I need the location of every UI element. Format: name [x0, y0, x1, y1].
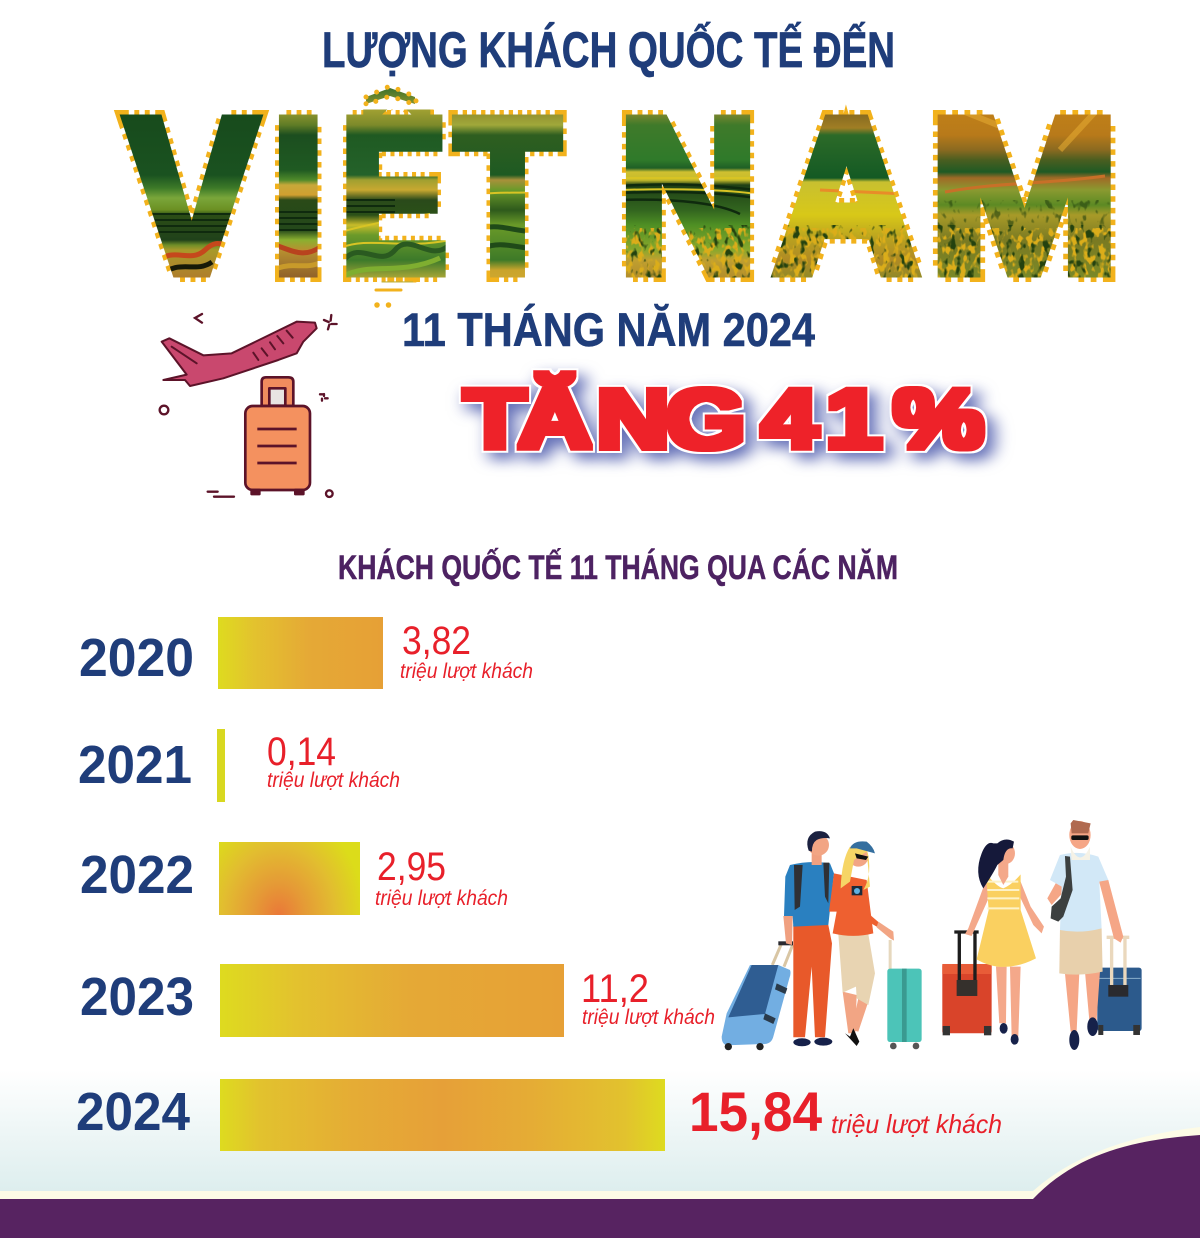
blue suitcase	[1097, 937, 1142, 1035]
woman with cap and camera	[829, 841, 894, 1046]
row 2023: 2023	[80, 967, 194, 1027]
dotted letter outlines: A	[774, 74, 919, 318]
row 2023: 11,2	[581, 967, 649, 1011]
dotted letter outlines: I	[272, 75, 325, 318]
blue rolling suitcase	[722, 941, 793, 1050]
accent marks of the letter E	[366, 86, 416, 305]
row 2023: triệu lượt khách	[582, 1006, 715, 1029]
bar chart	[76, 617, 1002, 1151]
row 2024: triệu lượt khách	[831, 1109, 1002, 1139]
row 2023	[80, 964, 715, 1037]
row 2024	[76, 1079, 1002, 1151]
row 2022: 2,95	[377, 845, 446, 889]
man in sunglasses	[1047, 820, 1123, 1050]
row 2024: 2024	[76, 1082, 190, 1142]
terraced landscape seen through the letters	[120, 88, 1111, 282]
illustration: travellers with luggage	[722, 820, 1142, 1050]
row 2022: 2022	[80, 845, 194, 905]
headline: TĂNG 41%: TĂNG 41%	[464, 372, 984, 466]
row 2022: triệu lượt khách	[375, 887, 508, 910]
bottom pale gradient band	[0, 1070, 1200, 1195]
row 2021	[78, 729, 400, 802]
dotted letter outlines: Ệ	[340, 74, 447, 318]
dotted letter outlines: N	[619, 74, 757, 318]
icon: airplane	[162, 322, 317, 386]
icon: suitcase	[245, 377, 310, 494]
sub heading: 11 THÁNG NĂM 2024	[402, 303, 815, 356]
row 2020	[79, 617, 533, 689]
decorative sparkles around the icon	[160, 314, 337, 497]
red suitcase	[942, 932, 992, 1035]
row 2020: 3,82	[402, 619, 471, 663]
row 2021: triệu lượt khách	[267, 769, 400, 792]
dotted letter outlines: T	[455, 73, 560, 318]
row 2022	[80, 842, 508, 915]
man in blue shirt	[783, 831, 834, 1046]
teal suitcase	[887, 940, 922, 1049]
chart heading: KHÁCH QUỐC TẾ 11 THÁNG QUA CÁC NĂM	[338, 548, 898, 587]
big heading: VIỆT NAM with dotted outline and landscape fill	[114, 84, 1116, 308]
row 2020: triệu lượt khách	[400, 660, 533, 683]
row 2024: 15,84	[689, 1080, 822, 1143]
row 2021: 2021	[78, 735, 192, 795]
bottom band: purple footer with cream edge and hump	[0, 1127, 1200, 1238]
woman in yellow dress	[965, 840, 1044, 1045]
row 2020: 2020	[79, 628, 194, 688]
dotted letter outlines	[114, 104, 1116, 282]
title line: LƯỢNG KHÁCH QUỐC TẾ ĐẾN	[322, 21, 895, 78]
dotted letter outlines: V	[127, 74, 256, 317]
icon: airplane and suitcase	[160, 314, 337, 497]
row 2021: 0,14	[267, 730, 336, 774]
dotted letter outlines: M	[929, 75, 1119, 318]
